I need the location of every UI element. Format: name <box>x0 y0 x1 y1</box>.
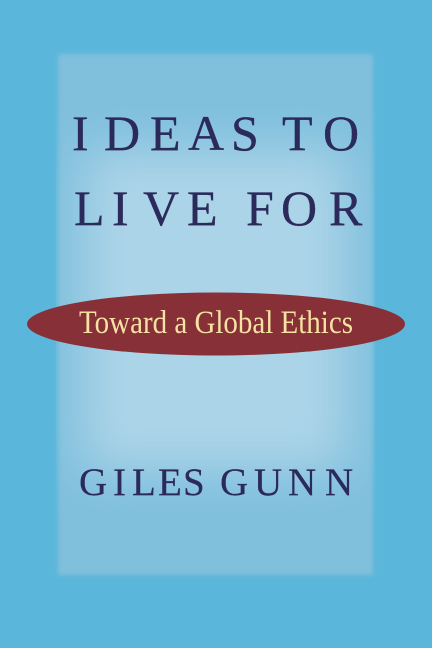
title line 1: IDEAS TO <box>72 105 359 161</box>
subtitle: Toward a Global Ethics <box>79 305 353 341</box>
subtitle oval <box>27 292 405 356</box>
title line 2: LIVE FOR <box>74 180 363 236</box>
title <box>72 105 363 236</box>
central light panel <box>58 54 373 575</box>
book cover <box>27 52 405 576</box>
author: GILES GUNN <box>79 461 353 504</box>
